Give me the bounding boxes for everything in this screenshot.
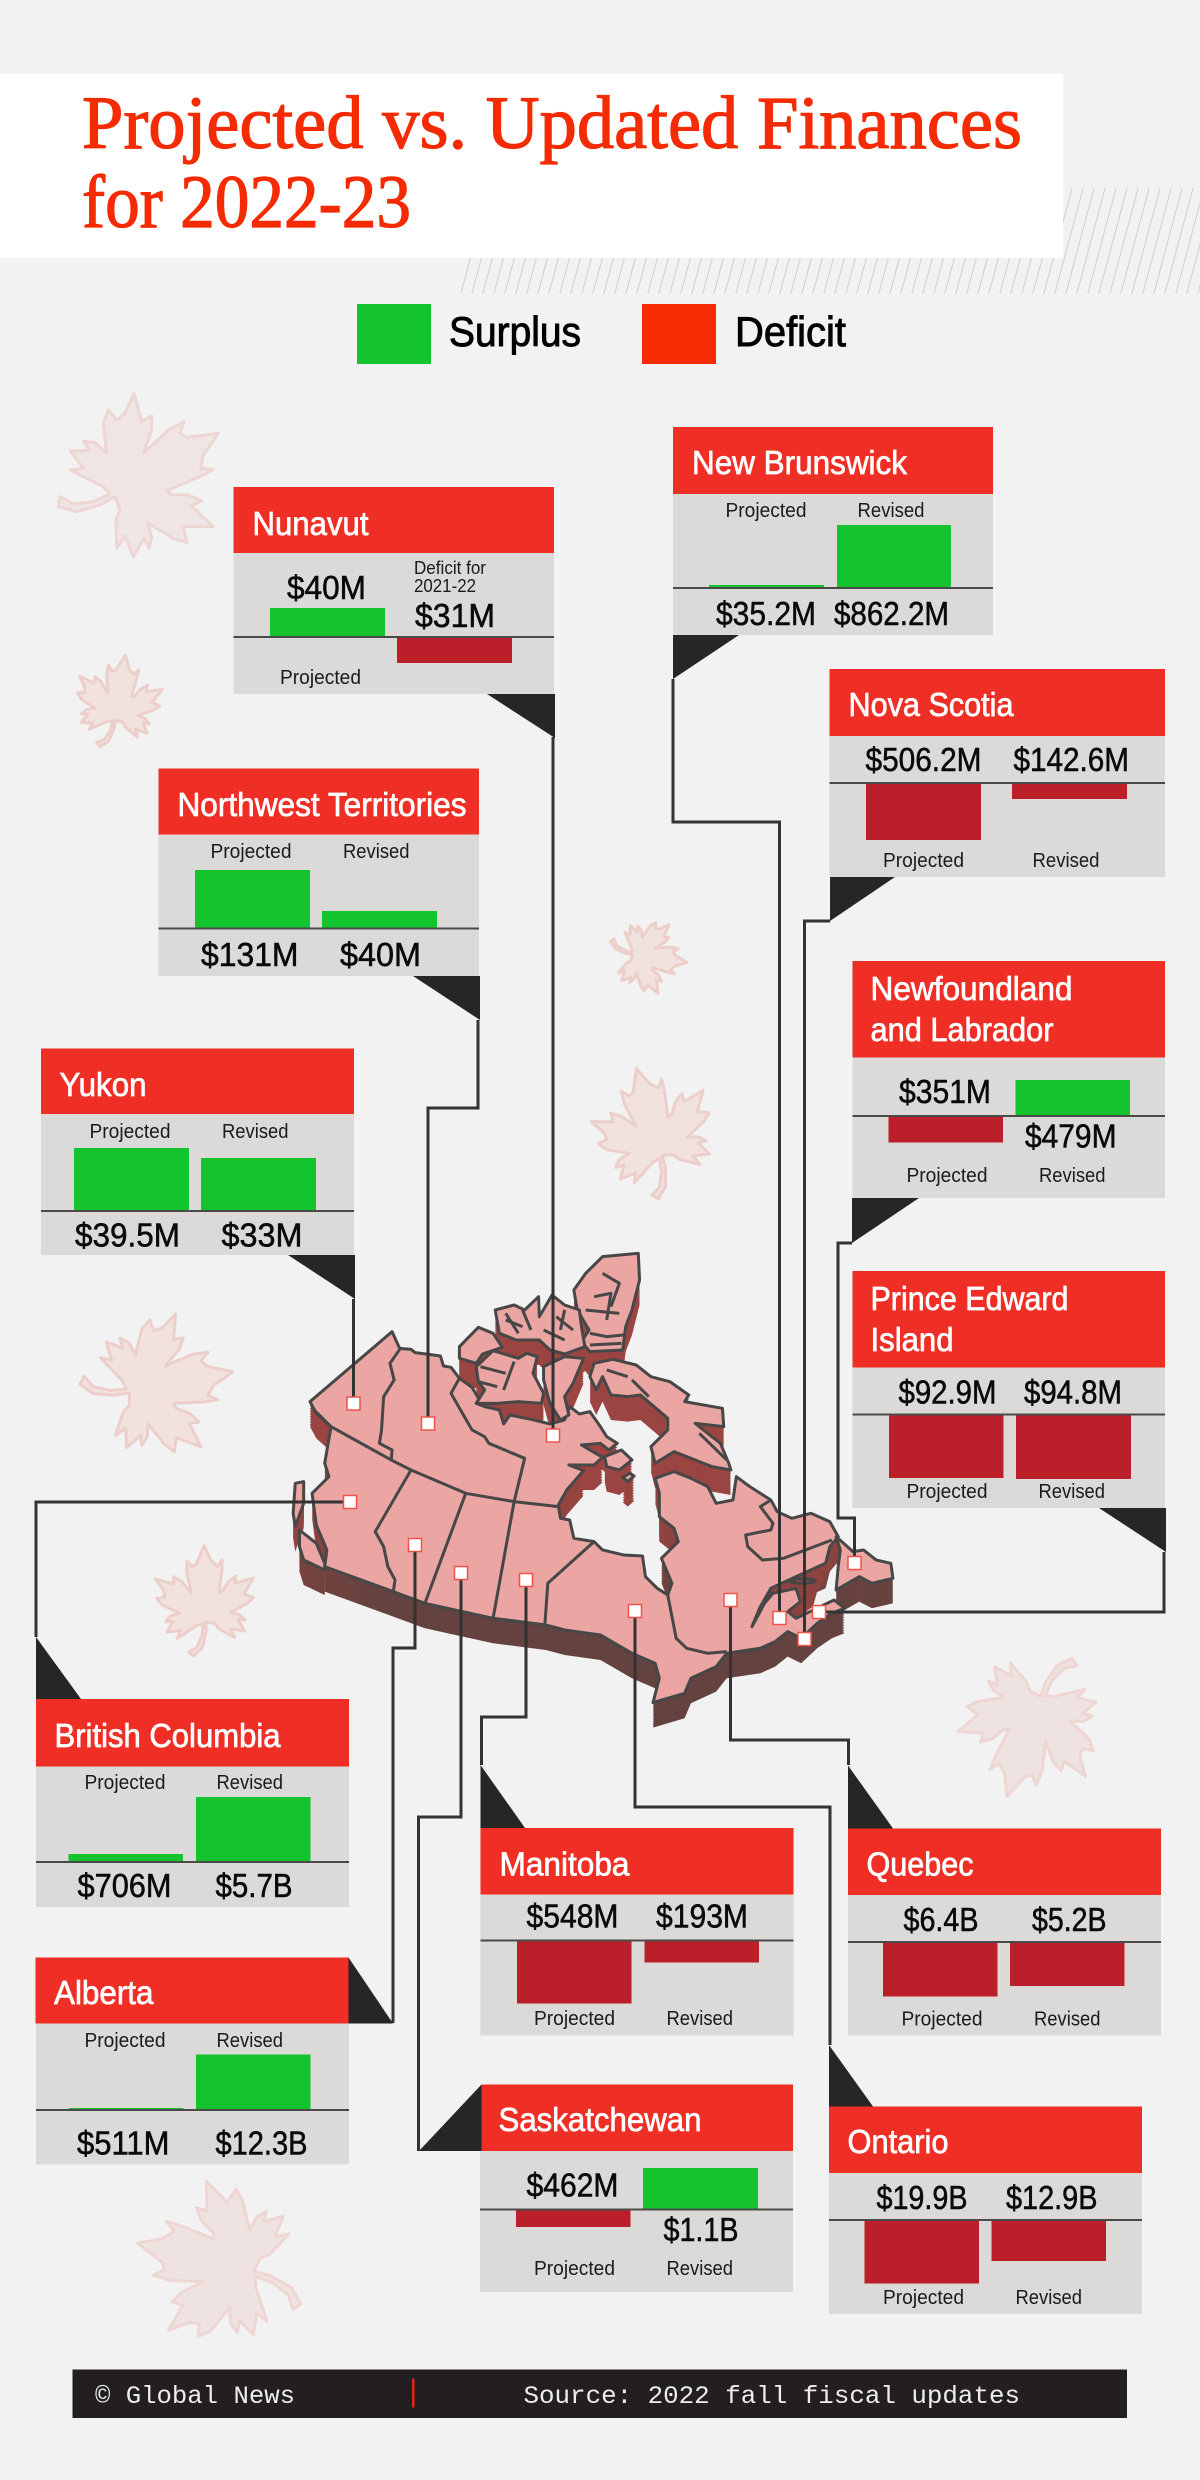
map: land surface [293,1253,893,1703]
Alberta values [77,2124,308,2162]
Newfoundland labels: Projected [906,1165,988,1187]
title: Projected vs. Updated Finances [82,82,1022,165]
New Brunswick labels [726,500,924,522]
Nunavut projected value: $40M [287,569,366,606]
Alberta labels: Projected [84,2030,166,2052]
Manitoba heading: Manitoba [500,1846,630,1882]
Yukon labels: Projected [90,1121,170,1143]
Newfoundland and Labrador heading: Newfoundland [870,970,1072,1007]
Northwest Territories values: $131M [201,936,298,973]
Saskatchewan revised bar [643,2168,758,2210]
Ontario labels: Projected [883,2287,964,2309]
Alberta values: $511M [77,2124,170,2162]
Northwest Territories values: $40M [340,936,421,973]
Nova Scotia projected bar [866,783,981,840]
legend: surplus swatch [357,304,431,364]
Nunavut deficit note: Deficit for [414,557,486,578]
Nova Scotia labels: Revised [1032,850,1100,872]
Newfoundland values: $351M [899,1073,991,1110]
Ontario revised bar [992,2220,1106,2261]
Northwest Territories labels: Revised [343,841,410,863]
Nova Scotia pointer [830,877,895,921]
Northwest Territories heading: Northwest Territories [178,786,466,823]
Nova Scotia values: $506.2M [866,741,982,778]
Saskatchewan labels: Revised [666,2258,733,2280]
panel: Saskatchewan [419,2084,793,2292]
British Columbia values: $5.7B [216,1867,292,1904]
New Brunswick values: $862.2M [834,595,949,632]
Manitoba values: $193M [656,1898,748,1934]
Manitoba labels: Revised [666,2008,733,2030]
panel: Yukon [41,1048,355,1299]
hatch pattern behind title [461,188,1200,294]
Nunavut projected label: Projected [280,667,361,689]
Saskatchewan projected bar [516,2210,630,2227]
Newfoundland labels [906,1165,1106,1187]
connector line: Yukon [352,1299,355,1403]
Quebec values [904,1901,1106,1938]
Yukon pointer [288,1255,355,1299]
Alberta projected bar [69,2108,184,2110]
connector line: Nova Scotia [804,921,830,1639]
panel: New Brunswick [673,427,993,679]
British Columbia labels: Projected [84,1772,166,1794]
panel: Alberta [36,1958,393,2164]
connector line: Manitoba [482,1580,526,1765]
panel: British Columbia [36,1637,349,1907]
Saskatchewan labels: Projected [534,2258,615,2280]
Prince Edward Island labels: Revised [1038,1481,1105,1503]
Yukon heading: Yukon [60,1066,146,1103]
title: for 2022-23 [82,161,411,244]
Ontario values: $19.9B [876,2179,968,2216]
Newfoundland revised bar [1016,1080,1130,1116]
Manitoba values [526,1898,748,1934]
Saskatchewan values: $1.1B [664,2211,738,2248]
legend: deficit swatch [642,304,716,364]
Northwest Territories labels: Projected [210,841,292,863]
Nunavut deficit note: 2021-22 [414,575,476,596]
Manitoba projected bar [517,1940,632,2004]
Ontario values: $12.9B [1006,2179,1098,2216]
map of Canada [293,1253,893,1728]
Alberta revised bar [196,2054,310,2110]
Quebec labels [902,2008,1100,2030]
Nova Scotia heading: Nova Scotia [848,686,1014,723]
connector line: Prince Edward Island [819,1552,1164,1612]
New Brunswick projected bar [709,585,824,588]
Prince Edward Island revised bar [1016,1414,1131,1479]
Quebec values: $5.2B [1032,1901,1106,1938]
Nova Scotia labels [883,850,1100,872]
Ontario projected bar [864,2220,979,2284]
Nunavut pointer [487,694,555,738]
map: extruded walls [293,1255,893,1728]
Newfoundland values: $479M [1025,1118,1116,1154]
Quebec revised bar [1010,1942,1124,1986]
map: provincial borders [314,1273,832,1653]
Quebec labels: Revised [1034,2008,1100,2030]
Nova Scotia labels: Projected [883,850,964,872]
Nunavut deficit bar [397,637,512,663]
Manitoba labels [534,2008,733,2030]
Quebec pointer [848,1766,893,1828]
connector line: Ontario [635,1611,830,2045]
connector line: British Columbia [36,1502,350,1637]
legend: surplus label: Surplus [449,308,581,355]
Prince Edward Island heading [870,1280,1068,1358]
British Columbia revised bar [196,1797,310,1862]
Yukon projected bar [74,1148,189,1211]
New Brunswick heading: New Brunswick [692,444,907,481]
panel: Nova Scotia [830,669,1165,921]
footer credit: © Global News [95,2382,295,2411]
footer source: Source: 2022 fall fiscal updates [524,2382,1020,2411]
Saskatchewan values [526,2166,738,2248]
Nunavut deficit value: $31M [415,597,495,634]
panel: Prince Edward Island [852,1271,1166,1552]
Alberta labels: Revised [216,2030,283,2052]
Quebec projected bar [883,1942,998,1996]
Prince Edward Island values: $92.9M [898,1374,996,1410]
Yukon labels: Revised [222,1121,288,1143]
New Brunswick labels: Revised [858,500,924,522]
Saskatchewan labels [534,2258,733,2280]
Alberta heading: Alberta [54,1974,154,2011]
British Columbia labels [84,1772,283,1794]
map location markers [344,1397,861,1646]
panel: Ontario [829,2045,1142,2314]
Prince Edward Island heading: Island [870,1321,954,1358]
Nova Scotia values: $142.6M [1014,741,1129,778]
Quebec heading: Quebec [866,1846,974,1882]
Yukon values: $39.5M [75,1216,180,1254]
Yukon values: $33M [222,1216,302,1254]
Newfoundland and Labrador heading [870,970,1072,1048]
Prince Edward Island labels [906,1481,1105,1503]
Yukon labels [90,1121,288,1143]
connector line: Northwest Territories [428,1020,478,1423]
legend [357,304,846,364]
Northwest Territories projected bar [195,870,310,929]
New Brunswick pointer [673,635,739,679]
British Columbia pointer [36,1637,81,1699]
Yukon values [75,1216,302,1254]
decorative maple leaves [53,393,1136,2383]
British Columbia projected bar [68,1854,183,1862]
Newfoundland labels: Revised [1039,1165,1106,1187]
Nova Scotia revised bar [1012,783,1127,799]
panel: Manitoba [480,1765,794,2036]
Newfoundland values [899,1073,1116,1154]
connector line: Newfoundland and Labrador [838,1243,854,1563]
panel: Newfoundland and Labrador [852,961,1165,1243]
connector line: New Brunswick [673,679,780,1618]
Newfoundland and Labrador heading: and Labrador [870,1011,1054,1048]
connector line: Saskatchewan [418,1573,461,2151]
Nunavut projected bar [270,608,385,637]
Nunavut deficit note [414,557,486,596]
Northwest Territories values [201,936,421,973]
Quebec labels: Projected [902,2008,982,2030]
British Columbia labels: Revised [216,1772,283,1794]
Newfoundland projected bar [888,1116,1003,1142]
Nunavut heading: Nunavut [252,505,368,542]
Prince Edward Island labels: Projected [906,1481,988,1503]
New Brunswick values: $35.2M [716,595,816,632]
Quebec values: $6.4B [904,1901,978,1938]
panel: Nunavut [234,487,555,738]
Manitoba values: $548M [526,1898,618,1934]
British Columbia heading: British Columbia [54,1717,281,1754]
footer bar [72,2370,1127,2418]
New Brunswick values [716,595,949,632]
Saskatchewan values: $462M [526,2166,618,2204]
Prince Edward Island heading: Prince Edward [870,1280,1068,1317]
Nova Scotia values [866,741,1129,778]
Ontario pointer [829,2045,873,2106]
Northwest Territories pointer [413,976,480,1020]
connector line: Nunavut [552,737,554,1435]
legend: deficit label: Deficit [735,308,846,355]
New Brunswick revised bar [837,525,951,588]
Northwest Territories revised bar [322,911,437,929]
panel: Northwest Territories [158,768,480,1020]
connector line: Quebec [730,1600,848,1765]
British Columbia values [78,1867,292,1904]
Manitoba pointer [480,1765,525,1828]
footer divider [412,2378,414,2408]
Alberta pointer [348,1958,393,2024]
Prince Edward Island pointer [1099,1508,1166,1552]
Ontario labels [883,2287,1082,2309]
British Columbia values: $706M [78,1867,172,1904]
Ontario heading: Ontario [848,2123,948,2160]
Ontario values [876,2179,1098,2216]
Manitoba revised bar [644,1940,759,1962]
Yukon revised bar [201,1158,316,1211]
Prince Edward Island values: $94.8M [1024,1374,1122,1410]
New Brunswick labels: Projected [726,500,806,522]
panel: Quebec [848,1766,1161,2036]
Newfoundland pointer [852,1198,919,1243]
Saskatchewan pointer [419,2084,482,2151]
Prince Edward Island projected bar [889,1414,1004,1478]
Alberta values: $12.3B [216,2124,308,2162]
title [0,74,1063,258]
connector line: Alberta [393,1545,415,2023]
Ontario labels: Revised [1016,2287,1082,2309]
Alberta labels [84,2030,283,2052]
Northwest Territories labels [210,841,410,863]
Manitoba labels: Projected [534,2008,615,2030]
Prince Edward Island values [898,1374,1122,1410]
Saskatchewan heading: Saskatchewan [498,2101,702,2138]
